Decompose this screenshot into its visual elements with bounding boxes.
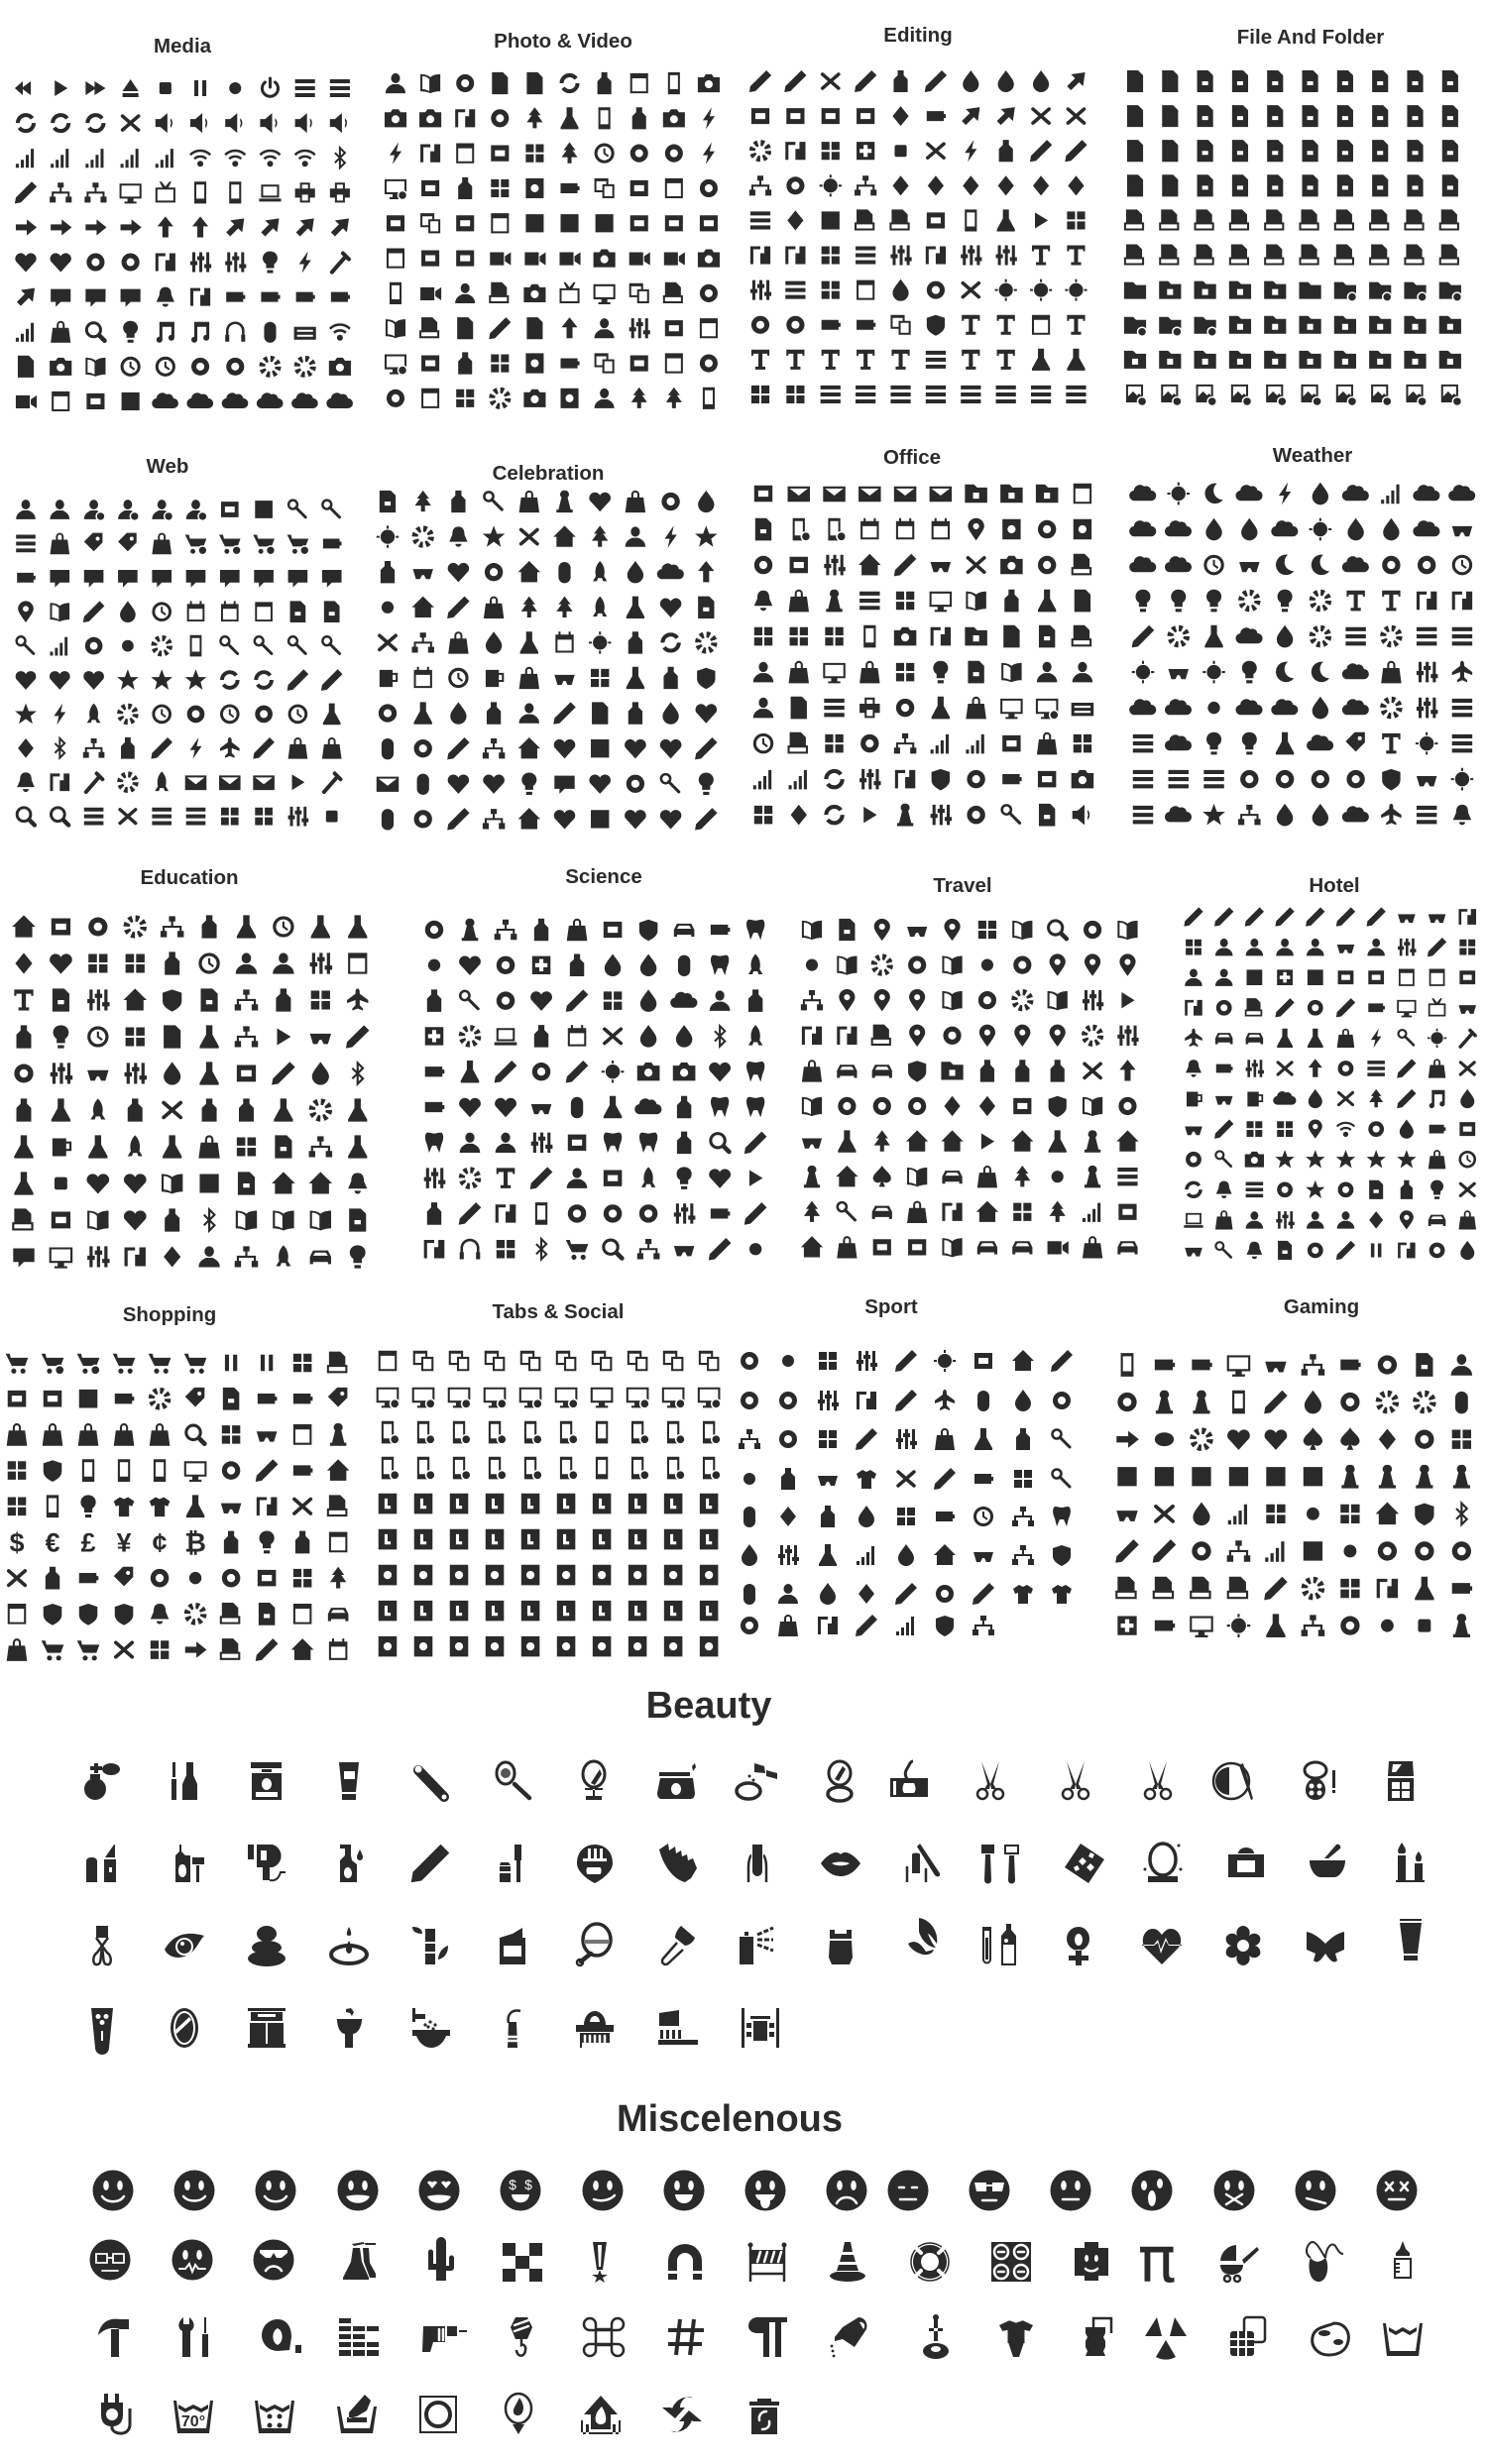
icon: eye: [165, 1934, 204, 1958]
icon grid: Travel: [801, 919, 1139, 1259]
currency symbols row: £: [81, 1527, 96, 1557]
currency symbols row: $: [10, 1527, 25, 1557]
panel: Gaming: [1115, 1295, 1472, 1637]
icon: cactus: [428, 2237, 454, 2281]
icon: watering can: [831, 2317, 867, 2357]
heading: Sport: Sport: [864, 1295, 918, 1318]
icon: eyelash curler: [93, 1926, 111, 1964]
icon grid: Web: [15, 500, 342, 826]
heading: Hotel: Hotel: [1309, 874, 1360, 897]
icon: baby bottle: [1394, 2241, 1412, 2279]
heading: Celebration: Celebration: [493, 462, 604, 485]
icon: open smile: [664, 2171, 704, 2210]
icon: skeptical: [1295, 2171, 1336, 2210]
icon: bamboo: [412, 1927, 448, 1964]
icon: heart eyes: [418, 2171, 460, 2210]
icon: cream jar: [500, 1928, 525, 1964]
heading: Media: Media: [154, 35, 212, 57]
icon grid: Shopping: [6, 1352, 349, 1661]
icon: nail brush: [576, 2011, 614, 2048]
icon: palette: [1305, 1762, 1335, 1800]
icon grid: Media: [15, 78, 353, 411]
panel: Editing: [749, 24, 1087, 403]
icon: vanity mirror: [1144, 1844, 1182, 1882]
icon: life ring: [911, 2243, 949, 2281]
icon: table mirror: [583, 1761, 605, 1800]
icon: film rack: [742, 2008, 779, 2048]
icon: comb: [659, 1844, 697, 1882]
icon: candles: [1396, 1843, 1425, 1882]
icon: power drill: [422, 2326, 467, 2352]
icon grid: Celebration: [377, 491, 718, 831]
icon: exclamation star: [592, 2242, 608, 2283]
icon: sunglasses: [970, 2171, 1009, 2210]
panel: Weather: [1129, 444, 1475, 826]
icon: grin: [337, 2171, 379, 2210]
icon: spray can: [740, 1928, 773, 1964]
icon: smiley 3: [256, 2171, 295, 2210]
icon: compact mirror: [828, 1761, 852, 1801]
icon: flower: [1226, 1926, 1260, 1965]
icon: thinning scissors: [1063, 1761, 1088, 1799]
currency symbols row: ¢: [153, 1527, 168, 1557]
icon: butterfly: [1307, 1932, 1344, 1961]
icon: tube and razor: [175, 1845, 204, 1882]
icon: razors: [981, 1845, 1019, 1883]
icon grid: Education: [12, 915, 369, 1269]
icon: square palette: [1388, 1761, 1414, 1801]
icon: road barrier: [747, 2242, 787, 2282]
icon: neutral: [1051, 2171, 1090, 2210]
icon: sad: [827, 2171, 866, 2210]
currency symbols row: €: [46, 1527, 60, 1557]
icon: scissors: [977, 1761, 1003, 1799]
icon: surprised: [1132, 2171, 1172, 2210]
icon: hand wash: [337, 2395, 377, 2433]
heading: Editing: Editing: [883, 24, 953, 47]
icon: house with flame: [581, 2396, 621, 2434]
heading: Miscelenous: Miscelenous: [617, 2098, 843, 2140]
icon: tall tube: [1400, 1919, 1422, 1960]
icon: pi: π: [1138, 2224, 1176, 2297]
panel: Photo and Video: [385, 30, 720, 409]
icon: makeup brush: [662, 1926, 695, 1964]
icon: bathroom cabinet: [248, 2008, 286, 2048]
icon: test tube and bottle: [982, 1924, 1016, 1965]
icon: brick wall: [339, 2318, 379, 2356]
icon: lips sealed: [1213, 2171, 1255, 2210]
icon: cream pot: [657, 1763, 696, 1799]
icon: wrench and screwdriver: [178, 2317, 208, 2357]
panel: Science: [424, 865, 766, 1260]
icon: lotion bottle: [829, 1930, 853, 1964]
currency symbols row: ¥: [117, 1527, 132, 1557]
icon grid: Photo and Video: [385, 72, 720, 409]
heading: Web: Web: [147, 455, 188, 478]
heading: Office: Office: [883, 446, 941, 469]
panel: File And Folder: [1124, 26, 1461, 405]
icon: wand tool: [508, 2011, 520, 2048]
icon: anchor toy: [923, 2314, 949, 2359]
icon grid: Sport: [739, 1350, 1073, 1636]
heading: Science: Science: [565, 865, 642, 888]
panel: Celebration: [377, 462, 718, 831]
icon: hash: [668, 2319, 704, 2355]
icon: nail polish: [172, 1762, 197, 1800]
icon: female symbol: [1067, 1927, 1089, 1965]
panel: Web: [15, 455, 342, 826]
icon: palette blob: [1313, 2323, 1348, 2355]
icon: baby bodysuit: [999, 2320, 1033, 2357]
icon: recycle arrows: [662, 2397, 702, 2432]
icon: pencil: [411, 1845, 449, 1882]
icon grid: Tabs and Social: [377, 1351, 721, 1656]
icon grid: Hotel: [1184, 907, 1476, 1260]
icon: dollar eyes: [500, 2171, 541, 2210]
icon grid: Weather: [1129, 483, 1475, 826]
heading: Shopping: Shopping: [123, 1303, 216, 1326]
icon: hand mirror: [577, 1924, 611, 1965]
icon: wash 70 degrees: 70°: [181, 2413, 205, 2430]
icon: perfume: [84, 1763, 120, 1800]
icon: oval mirror: [171, 2008, 198, 2048]
icon: smiley: [93, 2171, 133, 2210]
icon: lipstick and case: [86, 1845, 116, 1882]
panel: Education: [12, 866, 369, 1269]
panel: Office: [753, 446, 1093, 826]
icon: radiation: [1145, 2317, 1187, 2360]
panel: Sport: [739, 1295, 1073, 1636]
currency symbols row: ₿: [184, 1527, 206, 1557]
icon: wash dots: [255, 2401, 294, 2433]
heading: Photo & Video: Photo & Video: [494, 30, 632, 53]
panel: Miscelenous: [89, 2098, 1423, 2434]
icon: hairdressing scissors: [1145, 1761, 1171, 1799]
icon: dollar eyes: $: [524, 2177, 532, 2192]
icon: wash tub: [1383, 2323, 1423, 2356]
icon: razor blade: [1065, 1844, 1104, 1883]
icon grid: Gaming: [1115, 1353, 1472, 1637]
icon: paragraph: [748, 2317, 787, 2357]
icon: tape measure: [262, 2319, 301, 2353]
heading: File And Folder: File And Folder: [1237, 26, 1384, 49]
icon: wash 70 degrees: [173, 2401, 213, 2433]
panel: Tabs and Social: [377, 1300, 721, 1656]
icon: angry face: [254, 2240, 293, 2280]
icon: dead: [1376, 2171, 1418, 2210]
heading: Weather: Weather: [1273, 444, 1352, 467]
icon: stove: [991, 2242, 1031, 2282]
icon: foot brush: [414, 1766, 446, 1800]
icon: expressionless: [888, 2171, 928, 2210]
icon: epilator: [577, 1845, 613, 1883]
icon: leaf: [908, 1918, 937, 1955]
icon: powder and brush: [737, 1763, 777, 1799]
icon: mascara: [500, 1845, 521, 1882]
icon: hammer: [98, 2319, 129, 2357]
icon: tube: [339, 1762, 359, 1800]
icon: electric shaver: [91, 2008, 113, 2055]
icon: lego head: [1075, 2242, 1108, 2281]
icon: traffic cone: [830, 2242, 865, 2282]
icon grid: Editing: [749, 70, 1087, 403]
icon: jar: [251, 1762, 282, 1800]
heading: Education: Education: [140, 866, 239, 889]
panel: Hotel: [1184, 874, 1476, 1260]
icon: sick face: [172, 2240, 212, 2280]
heading: Travel: Travel: [933, 874, 992, 897]
icon: magnet: [668, 2244, 702, 2280]
icon: heart pulse: [1142, 1929, 1182, 1964]
icon: command symbol: [584, 2318, 624, 2356]
icon: bib: [1307, 2242, 1343, 2282]
icon: crane hook: [511, 2317, 532, 2356]
heading: Gaming: Gaming: [1284, 1295, 1359, 1318]
icon: dollar eyes: $: [509, 2177, 516, 2192]
icon: toothbrush: [658, 2010, 698, 2045]
icon: checker flag: [503, 2243, 542, 2282]
icon: recycle bin: [749, 2399, 779, 2434]
panel: Shopping: [6, 1303, 349, 1661]
icon: nail polish application: [907, 1844, 940, 1882]
heading: Beauty: Beauty: [646, 1685, 771, 1727]
icon: pump bottle: [340, 1845, 363, 1882]
icon: hair brush: [497, 1762, 529, 1798]
icon grid: Science: [424, 919, 766, 1260]
heading: Tabs & Social: Tabs & Social: [493, 1300, 624, 1323]
icon: smiley 2: [174, 2171, 214, 2210]
icon: cream case: [1228, 1848, 1264, 1877]
icon grid: File And Folder: [1124, 70, 1461, 405]
icon: plug with sun: [101, 2394, 130, 2433]
icon: nerd face: [89, 2240, 131, 2280]
icon: dryer drum: [419, 2396, 457, 2433]
icon: flame bulb: [506, 2394, 531, 2434]
icon: tongue out: [745, 2171, 785, 2210]
icon: eyeshadow disc: [1213, 1763, 1253, 1800]
icon: water drop ripple: [331, 1927, 367, 1963]
currency symbols row: [10, 1527, 347, 1557]
icon: cup and straw: [1086, 2318, 1111, 2356]
icon: smirk: [583, 2171, 623, 2210]
icon: lips: [821, 1852, 860, 1876]
icon: faucet and basin: [412, 2008, 450, 2048]
icon: hair follicle: [890, 1761, 928, 1797]
icon: nail: [748, 1845, 766, 1882]
panel: Media: [15, 35, 353, 411]
icon: sink: [337, 2008, 362, 2048]
icon: hair dryer: [248, 1845, 286, 1880]
panel: Travel: [801, 874, 1139, 1259]
icon: spa stones: [248, 1926, 286, 1966]
icon: mortar and pestle: [1310, 1845, 1345, 1877]
icon grid: Office: [753, 484, 1093, 826]
icon: baby stroller: [1220, 2245, 1259, 2282]
panel: Beauty: [84, 1685, 1425, 2055]
icon: cooling towers: [343, 2242, 376, 2280]
icon: waffles: [1230, 2317, 1265, 2356]
